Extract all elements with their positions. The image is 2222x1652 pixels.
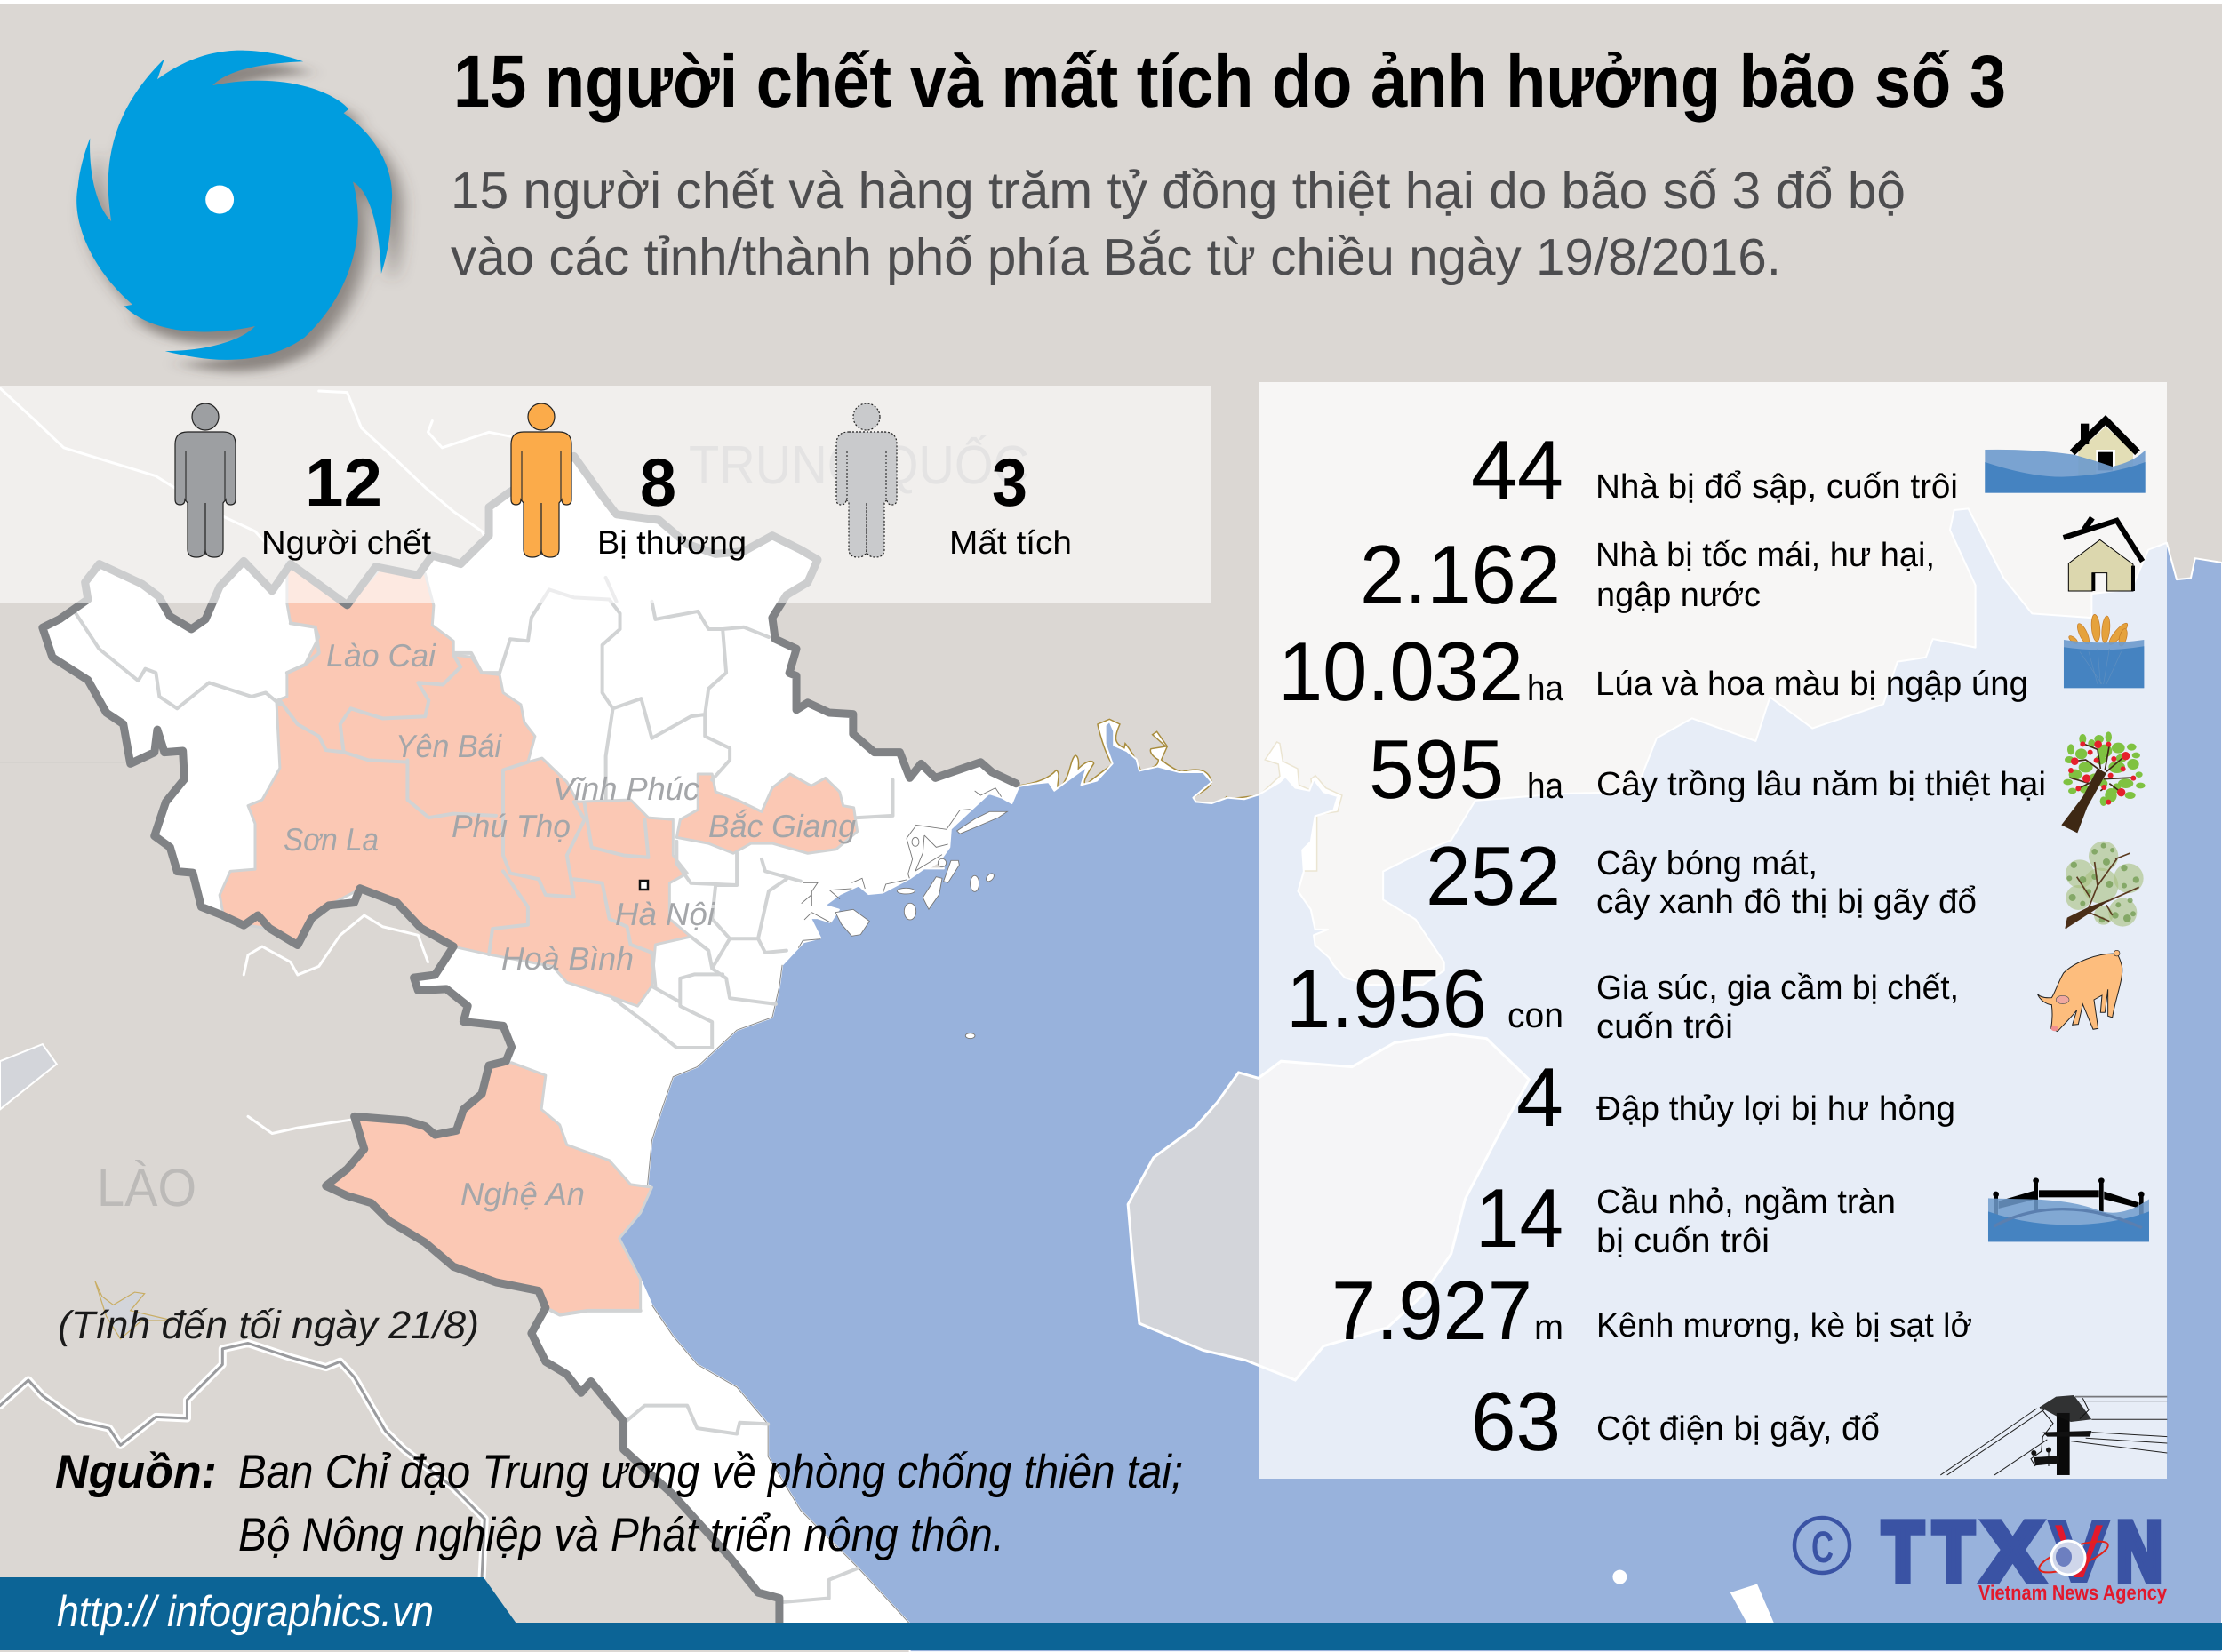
- logo: TTXVN: V: [2050, 1504, 2107, 1598]
- stat: power poles: 63: [1471, 1375, 1561, 1468]
- website tab: [0, 1577, 516, 1636]
- logo: TTXVN: N: [2116, 1504, 2162, 1598]
- province names: Lào Cai: [326, 637, 436, 674]
- Bac Giang province: [676, 774, 858, 853]
- province names: [284, 637, 856, 1212]
- stat: rice flooded: 10.032: [1278, 625, 1523, 718]
- province names: Sơn La: [284, 821, 379, 858]
- affected provinces north: Lao Cai, Yen Bai, Son La, Phu Tho, Vinh Phuc, Ha Noi, Hoa Binh: [220, 562, 858, 1006]
- stat: damaged houses: [1360, 528, 1935, 621]
- stat: bridges: Cầu nhỏ, ngầm tràn: [1596, 1184, 1896, 1221]
- logo: TTXVN: X: [1983, 1504, 2042, 1598]
- stat: dams: 4: [1516, 1050, 1563, 1144]
- province names: Nghệ An: [460, 1176, 585, 1212]
- Vietnam coastline: [648, 965, 910, 1624]
- Nghe An province: [326, 1063, 651, 1315]
- stat: power poles: [1471, 1375, 1880, 1468]
- province names: Hoà Bình: [501, 940, 634, 977]
- lakes: [0, 1044, 173, 1339]
- stat: dams: Đập thủy lợi bị hư hỏng: [1596, 1090, 1955, 1128]
- Ha Long bay coast and islands: [798, 788, 1007, 1039]
- stat: canals: m: [1534, 1308, 1563, 1347]
- stat: rice flooded: ha: [1527, 669, 1564, 708]
- stat: collapsed houses: 44: [1471, 423, 1563, 516]
- figure: injured: [511, 403, 571, 557]
- label dead: Người chết: [261, 524, 432, 561]
- stat: collapsed houses: Nhà bị đổ sập, cuốn trôi: [1595, 468, 1958, 506]
- icon: house with torn roof: [2064, 518, 2143, 591]
- logo: copyright mark: C: [1811, 1522, 1834, 1572]
- title: 15 người chết và mất tích do ảnh hưởng bão số 3: [453, 40, 2006, 123]
- stat: dams: [1516, 1050, 1955, 1144]
- icon: broken power pole: [1940, 1395, 2167, 1475]
- stat: bridges: [1475, 1171, 1896, 1265]
- source: [55, 1446, 1183, 1561]
- icon: fruit tree: [2061, 731, 2146, 833]
- Vietnam land: [43, 456, 1027, 1624]
- stat: damaged houses: Nhà bị tốc mái, hư hại,: [1595, 537, 1935, 574]
- icon: flooded rice: [2064, 614, 2144, 688]
- bottom bar: [0, 1623, 2222, 1650]
- stat: perennial trees: 595: [1369, 722, 1504, 816]
- province names: Hà Nội: [615, 896, 715, 932]
- source: Bộ Nông nghiệp và Phát triển nông thôn.: [238, 1509, 1004, 1561]
- stat: livestock: cuốn trôi: [1596, 1009, 1733, 1046]
- China coast band: [1019, 719, 1342, 871]
- subtitle: [451, 162, 1906, 286]
- icon: flooded bridge: [1988, 1177, 2149, 1241]
- legend panel: casualties: [0, 386, 1211, 603]
- stat: canals: Kênh mương, kè bị sạt lở: [1596, 1307, 1972, 1345]
- stat: perennial trees: Cây trồng lâu năm bị thiệt hại: [1596, 766, 2046, 803]
- label: China: TRUNG QUỐC: [689, 435, 1029, 495]
- figure: dead: [175, 403, 236, 557]
- offshore islands: [1612, 1570, 1774, 1624]
- stat: canals: 7.927: [1331, 1264, 1532, 1357]
- icon: shade tree: [2066, 842, 2144, 929]
- province names: Yên Bái: [396, 728, 502, 764]
- logo: copyright mark: [1794, 1518, 1850, 1573]
- stat: shade trees: 252: [1426, 829, 1561, 922]
- province names: Bắc Giang: [708, 808, 856, 844]
- source: Nguồn:: [55, 1446, 217, 1498]
- stat: perennial trees: [1369, 722, 2046, 816]
- subtitle: vào các tỉnh/thành phố phía Bắc từ chiều ngày 19/8/2016.: [451, 228, 1781, 286]
- province names: Phú Thọ: [452, 808, 571, 844]
- stat: shade trees: cây xanh đô thị bị gãy đổ: [1596, 883, 1977, 921]
- figure: missing: [836, 403, 897, 557]
- website tab: http:// infographics.vn: [57, 1588, 434, 1636]
- logo: TTXVN: T: [1882, 1504, 1923, 1598]
- stat: damaged houses: ngập nước: [1596, 577, 1761, 614]
- logo: TTXVN: [1882, 1504, 2162, 1598]
- stat: bridges: 14: [1475, 1171, 1563, 1265]
- stat: bridges: bị cuốn trôi: [1596, 1223, 1770, 1260]
- stat: perennial trees: ha: [1527, 767, 1564, 806]
- rivers in Laos and China: [0, 388, 510, 1577]
- province names: Vĩnh Phúc: [553, 770, 699, 807]
- sea: [619, 508, 2222, 1652]
- logo: TTXVN: T: [1933, 1504, 1974, 1598]
- stat: rice flooded: [1278, 625, 2028, 718]
- stat: canals: [1331, 1264, 1972, 1357]
- Hainan island: [1128, 1034, 1529, 1380]
- national border: [43, 456, 1016, 1624]
- stat: rice flooded: Lúa và hoa màu bị ngập úng: [1595, 666, 2028, 703]
- icon: flooded house: [1985, 420, 2146, 493]
- label missing: Mất tích: [949, 524, 1072, 561]
- stat: livestock: [1286, 952, 1959, 1046]
- stat: shade trees: [1426, 829, 1977, 922]
- source: Ban Chỉ đạo Trung ương về phòng chống thiên tai;: [238, 1446, 1183, 1498]
- number dead: 12: [305, 445, 382, 521]
- date note: (Tính đến tối ngày 21/8): [58, 1304, 479, 1347]
- province boundaries: [75, 578, 892, 1048]
- stat: shade trees: Cây bóng mát,: [1596, 845, 1818, 882]
- stat: damaged houses: 2.162: [1360, 528, 1561, 621]
- stat: livestock: Gia súc, gia cầm bị chết,: [1596, 970, 1959, 1007]
- panel: damage statistics: [1259, 382, 2167, 1479]
- Hanoi marker: [640, 881, 648, 890]
- icon: pig: [2037, 950, 2122, 1032]
- icon: cyclone: [76, 51, 402, 371]
- label injured: Bị thương: [597, 524, 747, 561]
- subtitle: 15 người chết và hàng trăm tỷ đồng thiệt hại do bão số 3 đổ bộ: [451, 162, 1906, 219]
- logo tagline: Vietnam News Agency: [1978, 1581, 2167, 1604]
- map of northern Vietnam and the gulf: [0, 388, 2222, 1652]
- stat: power poles: Cột điện bị gãy, đổ: [1596, 1410, 1880, 1448]
- stat: collapsed houses: [1471, 423, 1958, 516]
- number injured: 8: [640, 445, 676, 521]
- label: Laos: LÀO: [97, 1158, 196, 1217]
- stat: livestock: con: [1507, 996, 1563, 1035]
- stat: livestock: 1.956: [1286, 952, 1487, 1045]
- number missing: 3: [992, 445, 1027, 521]
